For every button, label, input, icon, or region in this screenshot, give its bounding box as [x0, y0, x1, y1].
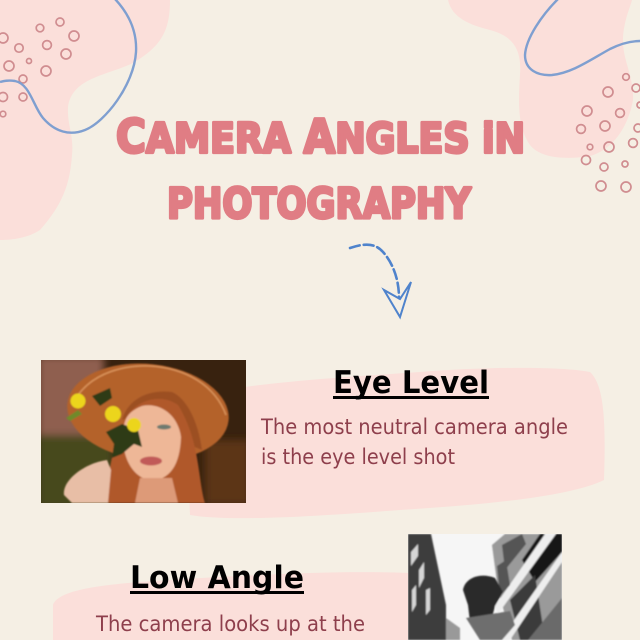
neck [135, 478, 178, 503]
blob: top left [0, 0, 170, 240]
title [116, 110, 525, 228]
hand [64, 460, 111, 503]
decorative dots: top right [577, 74, 640, 192]
photo: low angle street [408, 534, 562, 640]
hair [108, 399, 205, 503]
text: eye level description [260, 415, 568, 470]
right building [492, 534, 562, 640]
photo: woman in hat [38, 356, 250, 507]
photographer [463, 576, 503, 625]
text: eye level description: is the eye level shot [261, 445, 455, 470]
title: CAMERA ANGLES iN [116, 110, 525, 164]
eye [157, 424, 171, 430]
face [123, 405, 181, 481]
lips [140, 456, 162, 466]
panel: low angle blob [53, 572, 410, 640]
leaves [66, 388, 142, 458]
title: PHOTOGRAPHY [167, 179, 471, 228]
arrow [350, 245, 411, 317]
heading: eye level: Eye Level [333, 365, 489, 401]
text: low angle description: The camera looks up at the [95, 612, 365, 637]
left building [408, 534, 446, 640]
text: eye level description: The most neutral camera angle [260, 415, 568, 440]
squiggle: top right [525, 0, 640, 75]
decorative dots: top left [0, 18, 79, 117]
squiggle: top left [0, 0, 136, 133]
hat [66, 362, 230, 454]
flowers [70, 394, 86, 408]
blob: top right [448, 0, 633, 158]
heading: low angle: Low Angle [130, 560, 304, 596]
panel: eye level blob [185, 368, 605, 518]
